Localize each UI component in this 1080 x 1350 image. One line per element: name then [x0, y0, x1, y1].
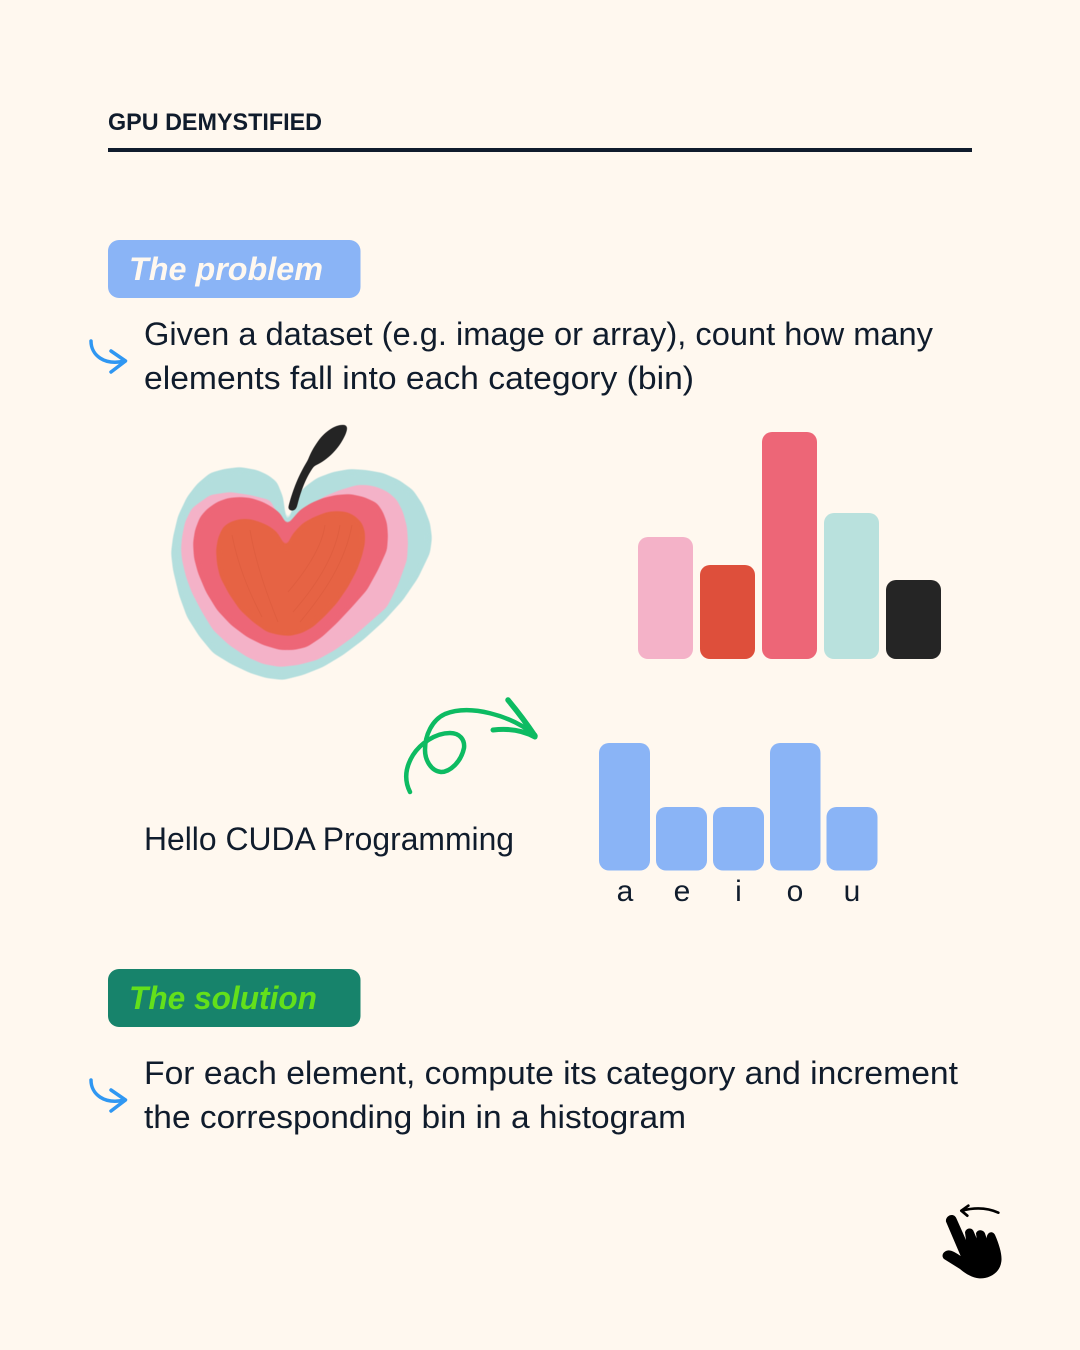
icon: green hand-drawn arrow: [406, 700, 535, 792]
icon: swipe hand: [943, 1206, 1002, 1278]
badge: the problem: The problem: [129, 251, 323, 287]
icon: blue arrow for solution: [91, 1080, 126, 1111]
illustration: painted apple: [171, 425, 432, 680]
badge: the problem: [108, 240, 360, 298]
chart: vowel histogram: e: [674, 875, 690, 908]
chart: apple colour histogram: [638, 432, 941, 659]
chart: vowel histogram: i: [735, 875, 742, 908]
header title: GPU DEMYSTIFIED: [108, 109, 322, 136]
problem description text: elements fall into each category (bin): [144, 360, 694, 396]
chart: vowel histogram: a: [617, 875, 634, 908]
chart: vowel histogram: o: [787, 875, 803, 908]
solution description text: For each element, compute its category and increment: [144, 1055, 958, 1091]
example text: Hello CUDA Programming: [144, 821, 514, 857]
badge: the solution: [108, 969, 360, 1027]
solution description text: [144, 1055, 958, 1135]
icon: blue arrow for problem: [91, 341, 126, 372]
problem description text: [144, 316, 933, 396]
chart: vowel histogram: [599, 743, 878, 908]
solution description text: the corresponding bin in a histogram: [144, 1099, 686, 1135]
problem description text: Given a dataset (e.g. image or array), count how many: [144, 316, 933, 352]
chart: vowel histogram: u: [844, 875, 860, 908]
badge: the solution: The solution: [129, 980, 317, 1016]
